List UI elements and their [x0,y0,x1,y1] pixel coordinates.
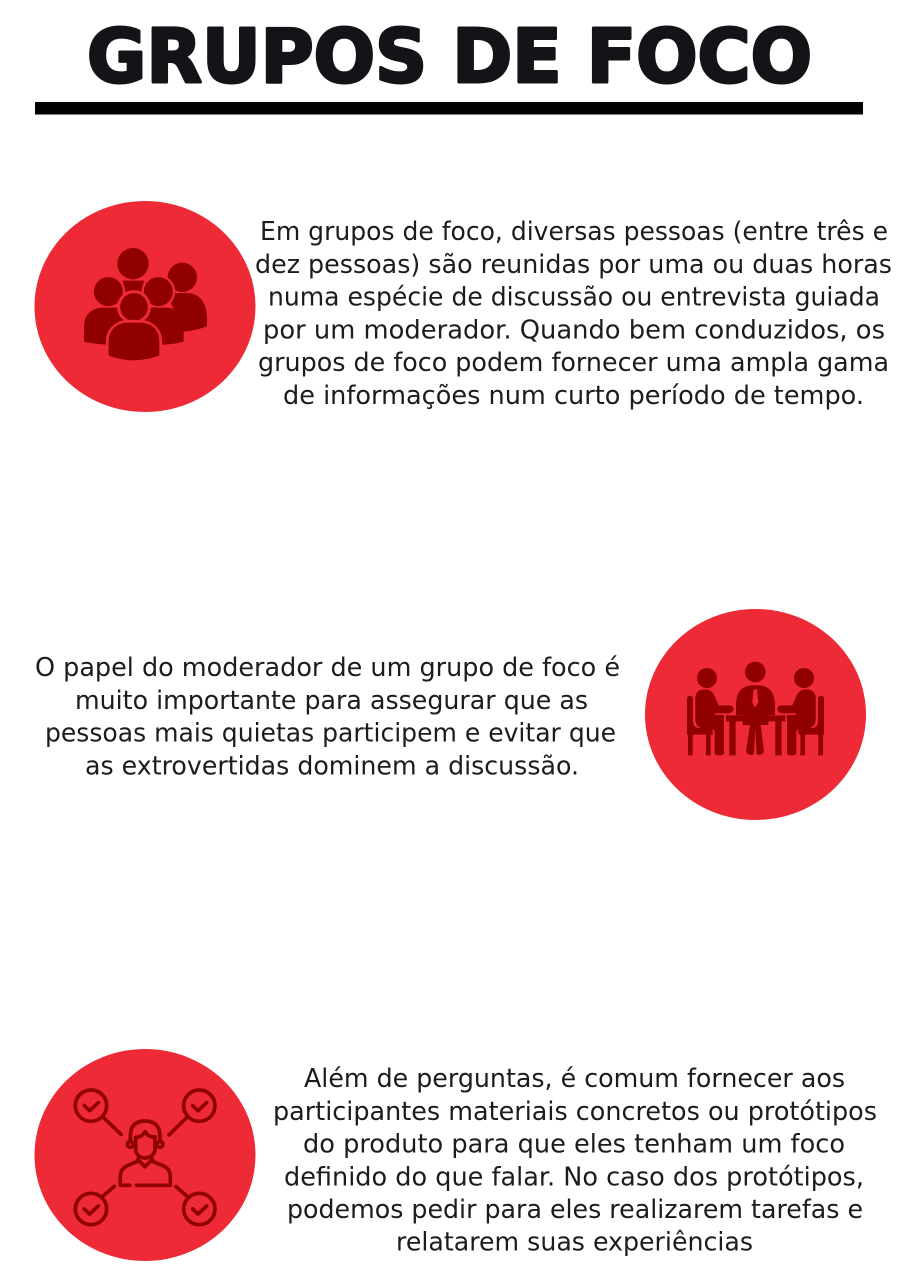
text block: materials: podemos pedir para eles realizarem tarefas e [287,1195,863,1225]
icon circle: meeting at a table [645,609,866,820]
panel: materials and prototypes [34,1049,877,1261]
text block: definition: de informações num curto período de tempo. [283,381,864,411]
icon circle: group of people [34,201,256,412]
text block: moderator: muito importante para assegurar que as [75,686,588,716]
text block: definition: Em grupos de foco, diversas pessoas (entre três e [260,217,888,247]
text block: materials: relatarem suas experiências [396,1228,753,1258]
icon circle: moderator with checkmarks [34,1049,256,1261]
panel: moderator role [35,609,866,820]
panel: what focus groups are [34,201,892,412]
text block: materials: Além de perguntas, é comum fornecer aos [304,1064,845,1094]
text block: definition: grupos de foco podem fornecer uma ampla gama [258,348,889,378]
text block: materials [273,1064,877,1258]
text block: materials: participantes materiais concretos ou protótipos [273,1097,877,1127]
text block: moderator [35,653,620,782]
title underline [35,102,863,114]
text block: definition: dez pessoas) são reunidas por uma ou duas horas [255,250,892,280]
title: GRUPOS DE FOCO [87,14,812,100]
text block: definition [255,217,892,411]
text block: moderator: O papel do moderador de um grupo de foco é [35,653,620,683]
text block: definition: numa espécie de discussão ou entrevista guiada [268,283,880,313]
text block: moderator: pessoas mais quietas participem e evitar que [45,718,616,748]
text block: materials: do produto para que eles tenham um foco [303,1130,845,1160]
text block: moderator: as extrovertidas dominem a discussão. [85,752,579,782]
text block: definition: por um moderador. Quando bem conduzidos, os [263,315,885,345]
text block: materials: definido do que falar. No caso dos protótipos, [284,1162,864,1192]
